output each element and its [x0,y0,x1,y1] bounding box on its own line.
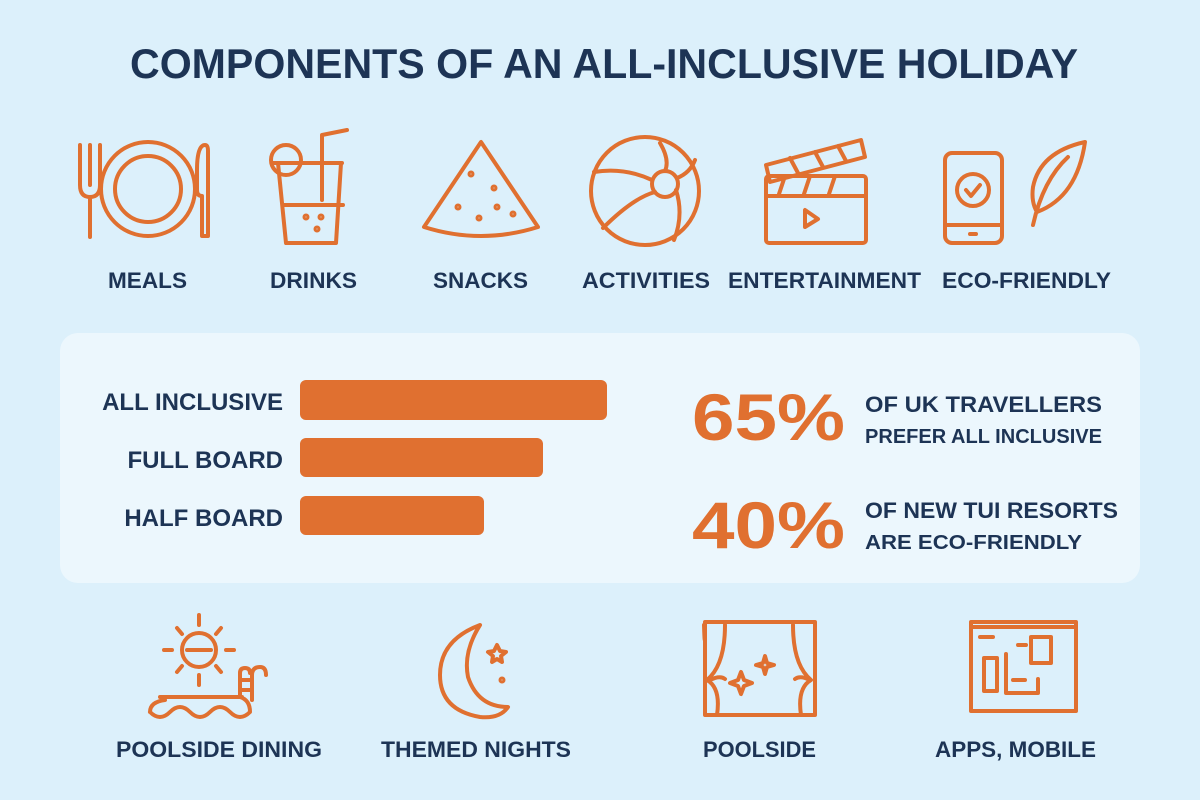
icon: eco-friendly [945,142,1085,243]
bottom labels [116,737,1096,762]
icon: apps, mobile [971,622,1076,711]
stat: 40% [692,488,1118,562]
bottom labels: APPS, MOBILE [935,737,1096,762]
stat: 65% [692,380,1102,454]
bar chart [102,380,607,535]
stat: 65%: PREFER ALL INCLUSIVE [865,426,1102,448]
stat: 40%: 40% [692,488,845,562]
bottom labels: POOLSIDE DINING [116,737,322,762]
icon: snacks [424,142,538,236]
stat: 40%: ARE ECO-FRIENDLY [865,532,1083,554]
bottom labels: POOLSIDE [703,737,816,762]
icon: themed nights [440,625,508,717]
stat: 65%: 65% [692,380,845,454]
stat: 65%: OF UK TRAVELLERS [865,392,1102,417]
icon: drinks [271,130,347,243]
icon labels: ENTERTAINMENT [728,268,922,293]
panel: stats [60,333,1140,583]
icon labels: DRINKS [270,268,357,293]
top icons row [80,130,1085,245]
title: COMPONENTS OF AN ALL-INCLUSIVE HOLIDAY [130,40,1078,87]
icon: meals [80,142,208,237]
bottom labels: THEMED NIGHTS [381,737,571,762]
icon labels: SNACKS [433,268,528,293]
icon labels: MEALS [108,268,187,293]
icon: poolside dining [150,615,266,717]
icon: entertainment [766,140,866,243]
bar chart: HALF BOARD [124,505,283,532]
icon labels: ECO-FRIENDLY [942,268,1111,293]
stat: 40%: OF NEW TUI RESORTS [865,498,1118,523]
icon labels [108,268,1111,293]
icon: poolside [704,622,815,715]
bar chart: FULL BOARD [127,447,283,474]
bottom icons [150,615,1076,717]
bar chart: ALL INCLUSIVE [102,389,283,416]
icon labels: ACTIVITIES [582,268,710,293]
icon: activities [591,137,699,245]
